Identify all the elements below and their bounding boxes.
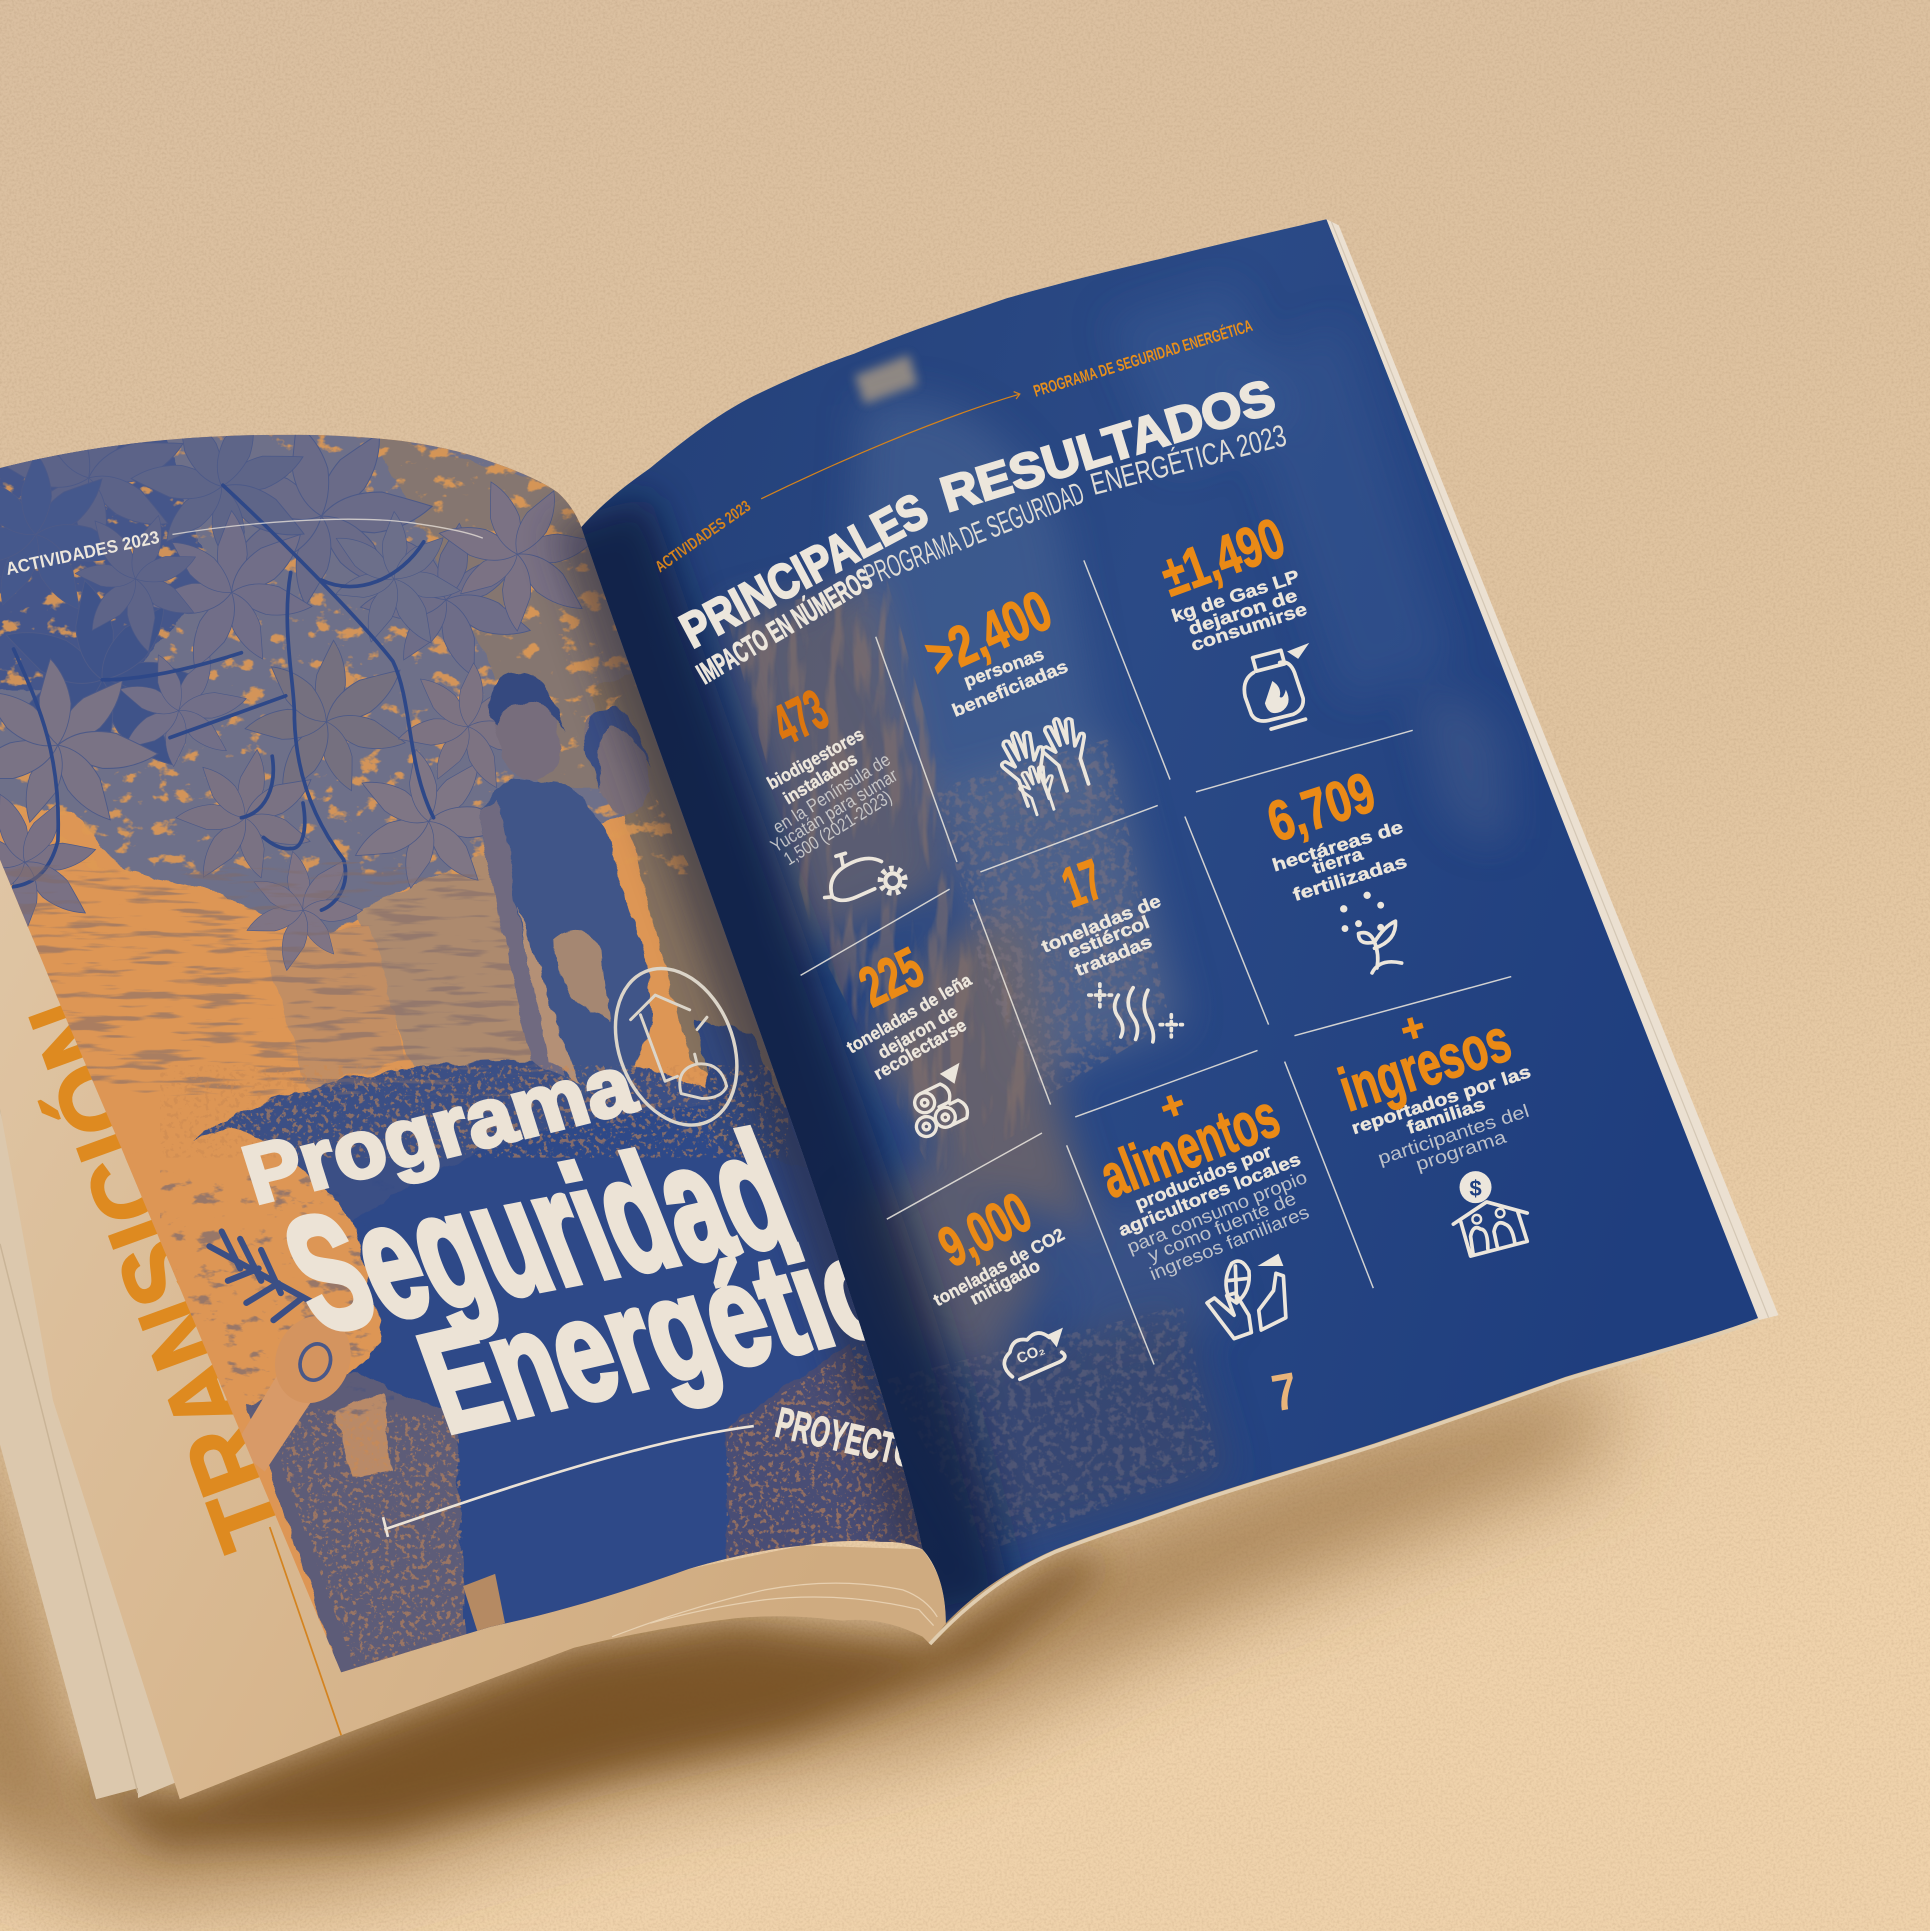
ghost photo: lower grain bbox=[887, 1305, 1219, 1552]
icon: biodigester and gear bbox=[811, 834, 909, 920]
panel: left page margin bbox=[0, 860, 947, 1799]
description: Yucatán para sumar bbox=[767, 764, 901, 856]
photo: speckled bottom areas bbox=[259, 1342, 961, 1675]
ghost photo: soft shapes bbox=[727, 283, 1509, 1552]
page number: 7 bbox=[1267, 1361, 1302, 1422]
photo: mottled mound bbox=[160, 1065, 788, 1158]
blue dome bbox=[308, 1105, 961, 1687]
heading: Principales Resultados: RESULTADOS bbox=[934, 369, 1281, 523]
icon: seedling and seeds bbox=[1340, 892, 1402, 973]
description: toneladas de bbox=[1039, 891, 1164, 957]
foliage clusters bbox=[0, 434, 588, 971]
ghost photo: streaks bbox=[727, 579, 1059, 1182]
description: mitigado bbox=[967, 1255, 1044, 1309]
header: right page Actividades 2023: ACTIVIDADES 2023 bbox=[652, 498, 754, 576]
description bbox=[1116, 1141, 1312, 1284]
cast shadows under the book bbox=[0, 1305, 1601, 1897]
photo: palm frond bbox=[209, 1232, 323, 1320]
panel: left page duotone photo bbox=[0, 434, 922, 1672]
icon: house, family and dollar: $ bbox=[1469, 1176, 1482, 1201]
description bbox=[949, 644, 1071, 721]
description: recolectarse bbox=[870, 1015, 970, 1084]
description: producidos por bbox=[1132, 1141, 1274, 1214]
gutter shadow bbox=[579, 517, 942, 1626]
number: >2,400 bbox=[917, 579, 1061, 689]
heading rule of the left page bbox=[172, 519, 483, 538]
icon: CO2 cloud: CO₂ bbox=[1015, 1342, 1047, 1367]
subheading: Programa de Seguridad Energética 2023: PROGRAMA DE SEGURIDAD bbox=[859, 475, 1089, 593]
photo: pipe fitting bbox=[234, 1305, 363, 1472]
description: beneficiadas bbox=[949, 656, 1071, 721]
subtitle rule bbox=[383, 1426, 754, 1537]
stat: 6,709 hectáreas bbox=[1260, 761, 1409, 973]
description bbox=[1039, 891, 1164, 980]
header: Programa de Seguridad Energética: PROGRAMA DE SEGURIDAD ENERGÉTICA bbox=[1031, 316, 1255, 401]
icon: CO2 cloud bbox=[1004, 1328, 1065, 1379]
description: toneladas de leña bbox=[843, 969, 976, 1057]
header rule with arrow bbox=[761, 392, 1020, 499]
description: agricultores locales bbox=[1116, 1149, 1304, 1240]
description: ingresos familiares bbox=[1146, 1201, 1312, 1284]
title: Seguridad: Seguridad bbox=[262, 1099, 815, 1366]
icon: hands holding corn bbox=[1207, 1254, 1286, 1339]
lower left mixed block bbox=[246, 1373, 466, 1687]
word: alimentos: alimentos bbox=[1091, 1081, 1288, 1212]
small post bbox=[463, 1574, 505, 1633]
description bbox=[1169, 566, 1309, 655]
number: plus: + bbox=[1396, 1004, 1430, 1053]
photo: two people bbox=[478, 665, 788, 1096]
description: familias bbox=[1404, 1094, 1488, 1138]
icon: raised hands bbox=[993, 712, 1099, 818]
title: Energética: Energética bbox=[401, 1193, 961, 1463]
description: toneladas de CO2 bbox=[930, 1224, 1068, 1310]
orange margin rule bbox=[270, 1527, 341, 1735]
description: hectáreas de bbox=[1270, 817, 1405, 875]
stat: 9,000 toneladas de CO2 bbox=[929, 1181, 1068, 1379]
number: ±1,490 bbox=[1153, 507, 1293, 609]
description bbox=[1349, 1061, 1533, 1175]
description: 1,500 (2021-2023) bbox=[780, 786, 895, 869]
description: dejaron de bbox=[1186, 585, 1300, 639]
subtitle: Proyecto: PROYECTOS bbox=[771, 1399, 936, 1481]
gutter shading bbox=[581, 517, 926, 1558]
header: Actividades 2023: ACTIVIDADES 2023 bbox=[4, 527, 161, 579]
icon: gas cylinder and down arrow bbox=[1244, 643, 1309, 729]
stat: 225 toneladas de leña bbox=[843, 936, 976, 1140]
page fold: sheet curl at the gutter bbox=[612, 1583, 937, 1637]
page edge: right block of sheets bbox=[1326, 219, 1779, 1320]
word: ingresos: ingresos bbox=[1331, 1005, 1519, 1125]
description: fertilizadas bbox=[1290, 851, 1409, 905]
description: dejaron de bbox=[874, 1001, 961, 1063]
description: en la Península de bbox=[769, 749, 894, 838]
heading: Principales Resultados bbox=[672, 369, 1281, 659]
icon: house, family and dollar bbox=[1453, 1171, 1527, 1256]
subheading: Impacto en números: IMPACTO EN NÚMEROS bbox=[691, 561, 878, 691]
description: participantes del bbox=[1375, 1100, 1532, 1169]
description: para consumo propio bbox=[1124, 1166, 1310, 1258]
description: estiércol bbox=[1065, 912, 1152, 963]
description: biodigestores bbox=[764, 724, 867, 793]
number: 17 bbox=[1054, 848, 1111, 920]
icon: biodigester house in circle bbox=[593, 950, 759, 1143]
number: 473 bbox=[764, 678, 838, 758]
grid dividers bbox=[801, 560, 1511, 1365]
title: Programa: Programa bbox=[232, 1037, 646, 1222]
description: programa bbox=[1413, 1126, 1509, 1175]
page edge: bottom bbox=[930, 1320, 1759, 1644]
photo: wall streak texture bbox=[0, 862, 579, 1096]
description: tierra bbox=[1310, 843, 1366, 878]
icon: firewood logs bbox=[903, 1063, 971, 1140]
description: reportados por las bbox=[1349, 1061, 1533, 1138]
number: 9,000 bbox=[929, 1181, 1041, 1280]
description: consumirse bbox=[1188, 599, 1309, 655]
ghost photo: tan block bbox=[855, 355, 918, 404]
branches bbox=[14, 485, 434, 910]
subheading: Programa de Seguridad Energética 2023: ENERGÉTICA 2023 bbox=[1087, 418, 1290, 502]
stat: 473 biodigestores bbox=[764, 678, 909, 920]
description bbox=[1270, 817, 1409, 905]
description: instalados bbox=[780, 748, 861, 808]
description: y como fuente de bbox=[1145, 1187, 1299, 1266]
photo: orange gaps in the foliage bbox=[0, 431, 690, 874]
panel: right page bbox=[567, 209, 1798, 1650]
description bbox=[764, 724, 901, 869]
number: 225 bbox=[850, 936, 933, 1020]
vertical margin text: Transición: TRANSICIÓN bbox=[8, 981, 311, 1563]
mound of the biodigester bbox=[192, 1059, 710, 1222]
description: personas bbox=[961, 644, 1047, 691]
heading: Principales Resultados: PRINCIPALES bbox=[672, 483, 937, 659]
description: kg de Gas LP bbox=[1169, 566, 1302, 626]
stat: alimentos bbox=[1091, 1081, 1312, 1339]
number: plus: + bbox=[1154, 1081, 1191, 1130]
stat: 1,490 kg de Gas LP bbox=[1153, 507, 1309, 729]
number: 6,709 bbox=[1260, 761, 1383, 855]
description: tratadas bbox=[1072, 931, 1155, 980]
stat: >2,400 personas beneficiadas bbox=[917, 579, 1099, 818]
page stack: loose sheets on the left bbox=[0, 862, 197, 1799]
stat: ingresos bbox=[1331, 1004, 1533, 1256]
photo: scene shapes bbox=[0, 419, 961, 1687]
icon: odour waves and sparkles bbox=[1089, 984, 1182, 1042]
stat: 17 toneladas de estiércol bbox=[1039, 848, 1182, 1042]
ghost photo: machine pattern bbox=[936, 739, 1170, 1096]
